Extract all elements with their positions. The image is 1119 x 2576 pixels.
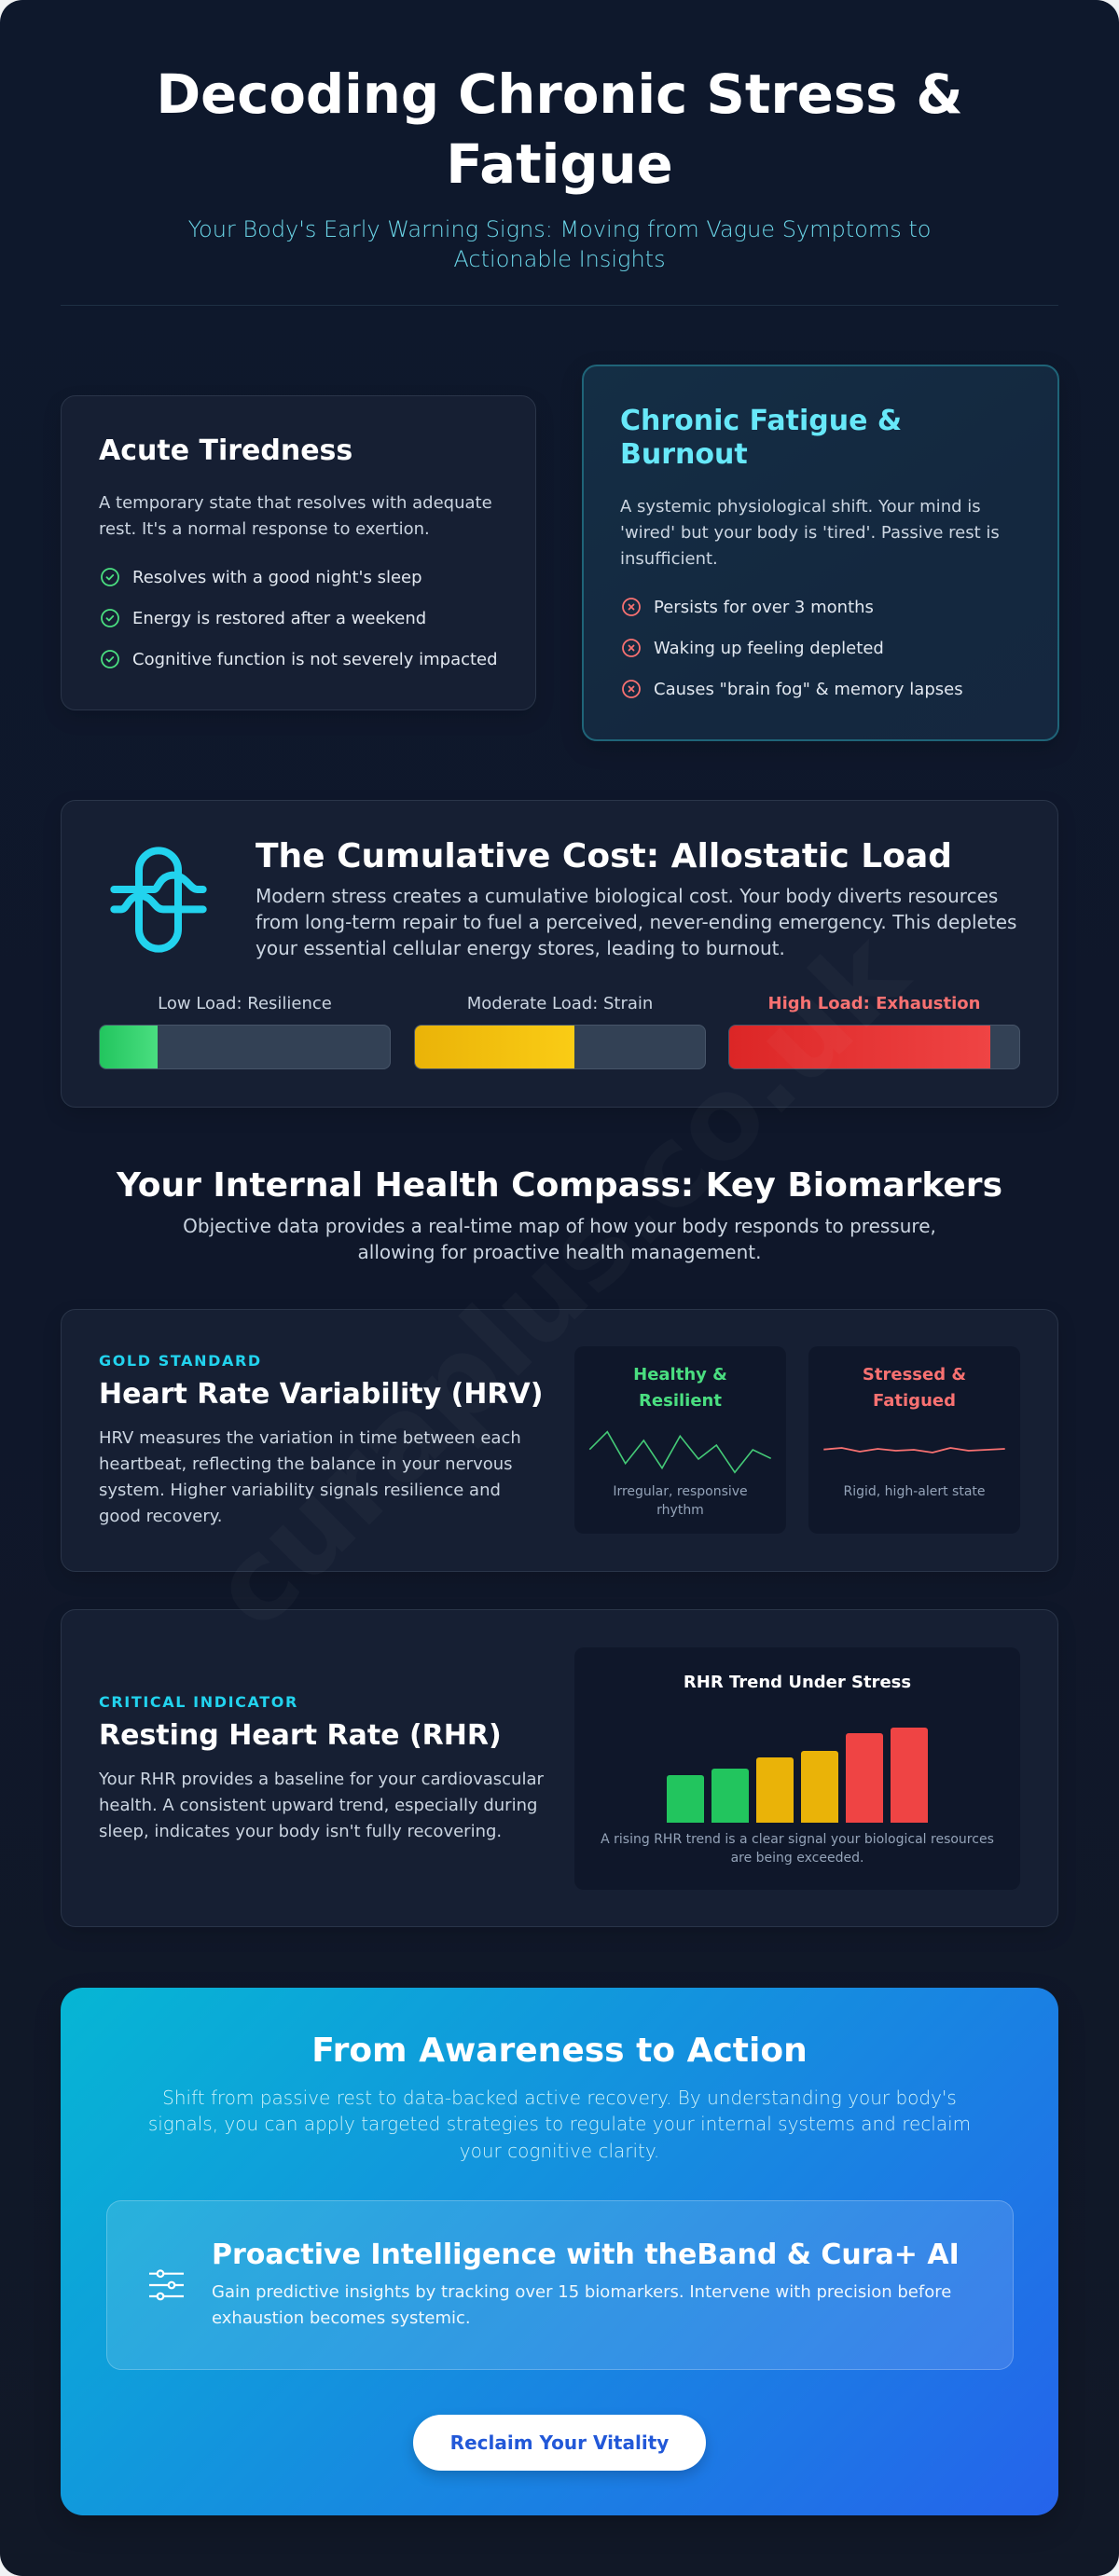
line: irregular rhythm: [589, 1430, 771, 1473]
icon: cross: [622, 598, 641, 616]
action description: your cognitive clarity.: [460, 2140, 659, 2162]
panel: chronic fatigue: [582, 365, 1059, 741]
heading: chronic fatigue: [620, 405, 902, 471]
acute description: [99, 493, 492, 539]
HRV description: good recovery.: [99, 1507, 223, 1526]
icon: check: [101, 650, 119, 668]
icon: check: [101, 568, 119, 586]
bar 1: [667, 1775, 704, 1823]
chart caption: A rising RHR trend is a clear signal your biological resources: [601, 1832, 994, 1847]
tag: gold standard: GOLD STANDARD: [99, 1352, 262, 1370]
biomarkers description: Objective data provides a real-time map of how your body responds to pressure,: [183, 1215, 936, 1237]
allostatic description: Modern stress creates a cumulative biological cost. Your body diverts resources: [256, 885, 998, 907]
bar 5: [846, 1733, 883, 1823]
list item: Resolves with a good night's sleep: [132, 568, 422, 587]
heading: awareness to action: From Awareness to Action: [311, 2032, 808, 2070]
icon: cross: [622, 639, 641, 657]
tag: critical indicator: CRITICAL INDICATOR: [99, 1693, 298, 1711]
label: healthy: Resilient: [639, 1391, 722, 1411]
heading: chronic fatigue: Chronic Fatigue &: [620, 405, 902, 437]
caption: stressed: Rigid, high-alert state: [843, 1484, 985, 1499]
chronic description: [620, 497, 1000, 569]
bar 4: [801, 1751, 838, 1823]
line: rigid rhythm: [823, 1447, 1005, 1453]
RHR description: health. A consistent upward trend, especially during: [99, 1796, 537, 1815]
RHR description: Your RHR provides a baseline for your cardiovascular: [99, 1770, 544, 1789]
acute description: rest. It's a normal response to exertion.: [99, 519, 430, 539]
bar 6: [891, 1728, 928, 1823]
chronic description: insufficient.: [620, 549, 718, 569]
list item: Causes "brain fog" & memory lapses: [654, 680, 963, 699]
heading: acute tiredness: Acute Tiredness: [99, 434, 352, 467]
list item: Persists for over 3 months: [654, 598, 874, 617]
biomarkers description: [183, 1215, 936, 1263]
panel: RHR: [61, 1609, 1058, 1927]
label: low load: Low Load: Resilience: [158, 994, 332, 1013]
action description: signals, you can apply targeted strategies to regulate your internal systems and reclaim: [148, 2113, 971, 2135]
label: stressed: [863, 1365, 966, 1411]
label: healthy: Healthy &: [633, 1365, 727, 1384]
biomarkers description: allowing for proactive health management.: [358, 1241, 761, 1263]
subtitle: [188, 216, 931, 272]
heading: proactive intelligence: Proactive Intelligence with theBand & Cura+ AI: [212, 2239, 960, 2271]
bar: low load: [99, 1025, 391, 1069]
icon: cross: [622, 680, 641, 698]
bars: [667, 1728, 928, 1823]
heading: RHR: Resting Heart Rate (RHR): [99, 1719, 502, 1752]
caption: healthy: [613, 1484, 748, 1518]
button: reclaim your vitality: [413, 2415, 706, 2471]
bar: moderate load: [414, 1025, 706, 1069]
acute description: A temporary state that resolves with adequate: [99, 493, 492, 513]
heading: key biomarkers: Your Internal Health Compass: Key Biomarkers: [117, 1166, 1002, 1205]
icon: check: [101, 609, 119, 627]
chart: RHR trend: [574, 1647, 1020, 1890]
HRV description: HRV measures the variation in time between each: [99, 1428, 521, 1448]
icon: allostatic knot: [110, 847, 207, 953]
list item: Energy is restored after a weekend: [132, 609, 426, 628]
title: Decoding Chronic Stress &: [156, 63, 963, 126]
label: healthy: [633, 1365, 727, 1411]
HRV description: [99, 1428, 521, 1526]
heading: chronic fatigue: Burnout: [620, 438, 748, 471]
chart title: RHR Trend Under Stress: [684, 1673, 911, 1692]
proactive description: Gain predictive insights by tracking over 15 biomarkers. Intervene with precision before: [212, 2282, 951, 2302]
subtitle: Actionable Insights: [453, 246, 666, 272]
allostatic description: from long-term repair to fuel a perceived, never-ending emergency. This depletes: [256, 911, 1016, 933]
chart: stressed HRV: [808, 1346, 1020, 1534]
RHR description: sleep, indicates your body isn't fully recovering.: [99, 1822, 502, 1841]
panel: call to action: [61, 1988, 1058, 2515]
label: stressed: Stressed &: [863, 1365, 966, 1384]
caption: healthy: rhythm: [656, 1503, 704, 1518]
chart caption: are being exceeded.: [731, 1851, 863, 1866]
subtitle: Your Body's Early Warning Signs: Moving from Vague Symptoms to: [188, 216, 931, 242]
icon: sliders: [149, 2269, 184, 2301]
allostatic description: your essential cellular energy stores, leading to burnout.: [256, 937, 785, 959]
HRV description: system. Higher variability signals resilience and: [99, 1481, 501, 1500]
chronic description: A systemic physiological shift. Your mind is: [620, 497, 981, 517]
chart caption: [601, 1832, 994, 1866]
RHR description: [99, 1770, 544, 1841]
heading: allostatic load: The Cumulative Cost: Allostatic Load: [256, 837, 952, 875]
bar: high load: [728, 1025, 1020, 1069]
heading: HRV: Heart Rate Variability (HRV): [99, 1378, 543, 1411]
panel: acute tiredness: [61, 395, 536, 710]
list item: Waking up feeling depleted: [654, 639, 884, 658]
chronic description: 'wired' but your body is 'tired'. Passive rest is: [620, 523, 1000, 543]
label: moderate load: Moderate Load: Strain: [467, 994, 653, 1013]
bar 2: [711, 1769, 749, 1823]
HRV description: heartbeat, reflecting the balance in your nervous: [99, 1454, 513, 1474]
title: [156, 63, 963, 196]
bar 3: [756, 1757, 794, 1823]
action description: Shift from passive rest to data-backed active recovery. By understanding your body's: [162, 2087, 957, 2109]
label: stressed: Fatigued: [873, 1391, 956, 1411]
list item: Cognitive function is not severely impacted: [132, 650, 498, 669]
panel: proactive intelligence: [106, 2200, 1014, 2370]
proactive description: exhaustion becomes systemic.: [212, 2308, 471, 2328]
panel: allostatic load: [61, 800, 1058, 1108]
caption: healthy: Irregular, responsive: [613, 1484, 748, 1499]
title: Fatigue: [446, 133, 673, 196]
panel: HRV: [61, 1309, 1058, 1572]
chart: healthy HRV: [574, 1346, 786, 1534]
allostatic description: [256, 885, 1016, 959]
label: high load: High Load: Exhaustion: [768, 994, 980, 1013]
action description: [148, 2087, 971, 2162]
proactive description: [212, 2282, 951, 2328]
watermark: curaplus.co.uk: [186, 909, 932, 1654]
button: reclaim your vitality: Reclaim Your Vitality: [450, 2431, 669, 2454]
